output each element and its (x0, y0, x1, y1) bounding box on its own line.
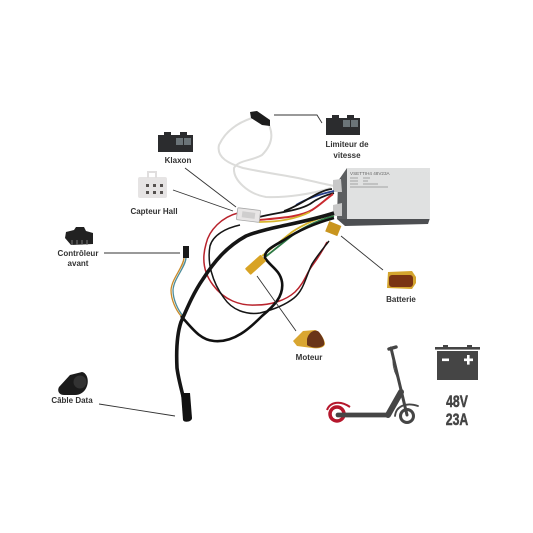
label: limiteur de vitesse (325, 140, 369, 160)
yellow battery connector on controller (325, 221, 341, 236)
leader: limiteur (274, 115, 322, 123)
icon: contrôleur connector (65, 227, 93, 245)
leader: klaxon (185, 168, 236, 207)
label: limiteur de vitesse: Limiteur de (325, 140, 369, 149)
leader: capteur hall (173, 190, 233, 211)
icon: scooter (327, 347, 418, 422)
black motor cable (181, 218, 334, 341)
controller side (337, 168, 347, 222)
motor phase wires (262, 214, 334, 258)
icon: capteur hall connector (138, 172, 167, 198)
scooter frame (338, 347, 418, 422)
spec: voltage and amperage: 48V (446, 393, 468, 412)
multicolour harness to white plug (259, 189, 334, 222)
yellow motor connector (245, 255, 266, 275)
label: moteur: Moteur (296, 353, 322, 362)
icon: moteur connector (293, 330, 325, 348)
label: câble data: Câble Data (51, 396, 93, 405)
data cable connector (181, 393, 192, 422)
white speed limiter wires (219, 118, 334, 197)
white hall plug on harness (236, 208, 261, 222)
thin black power wire (209, 225, 329, 313)
spec: voltage and amperage: 23A (446, 411, 468, 430)
label: contrôleur avant (58, 249, 98, 268)
controller wire glands (333, 179, 342, 216)
leader: moteur (257, 276, 296, 331)
spec: voltage and amperage (446, 393, 468, 430)
label: contrôleur avant: Contrôleur (58, 249, 98, 258)
red power wire (204, 213, 327, 305)
leader: câble data (99, 404, 175, 416)
label: limiteur de vitesse: vitesse (333, 151, 361, 160)
front controller plug (183, 246, 189, 258)
leader: batterie (341, 236, 383, 270)
label: klaxon: Klaxon (165, 156, 191, 165)
front controller thin wires (171, 258, 186, 316)
icon: klaxon connector (158, 132, 193, 152)
icon: batterie connector (387, 271, 416, 289)
speed limiter plug (250, 111, 270, 126)
label: contrôleur avant: avant (68, 259, 89, 268)
label: capteur hall: Capteur Hall (130, 207, 178, 216)
controller box (333, 168, 430, 226)
label: batterie: Batterie (386, 295, 416, 304)
icon: battery (435, 345, 480, 380)
front red wheel (327, 403, 350, 421)
thick black data cable (177, 213, 334, 412)
icon: limiteur connector (326, 115, 360, 135)
icon: câble data connector (58, 372, 88, 395)
controller label: VSETTIH4 48V23A (350, 171, 391, 176)
controller face (347, 168, 430, 219)
leader: contrôleur avant (104, 252, 180, 254)
